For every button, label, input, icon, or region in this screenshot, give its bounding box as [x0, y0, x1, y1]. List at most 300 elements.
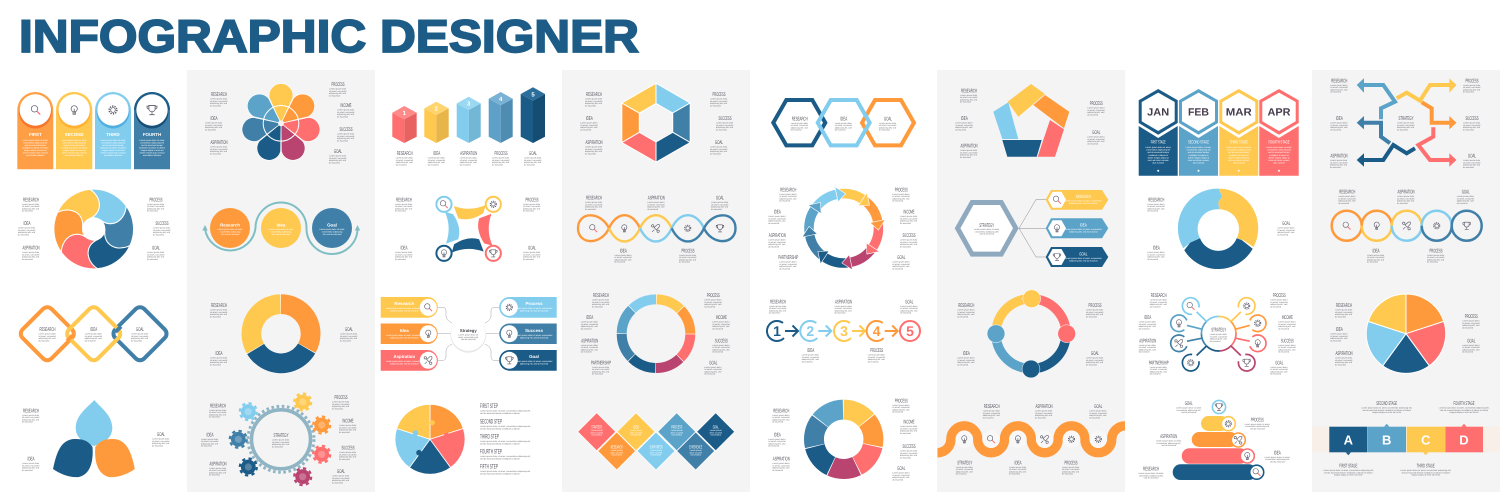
text: goal: GOAL	[1185, 401, 1193, 407]
card: mar: THIRD STAGE	[1230, 140, 1248, 144]
text: success: Lorem ipsum dolor	[1463, 122, 1481, 124]
text: research: Lorem ipsum dolor	[585, 98, 603, 100]
text: idea	[205, 116, 223, 131]
text: process	[1270, 293, 1288, 308]
text: process: do eiusmod	[329, 94, 341, 97]
labels: diamond text: dolor sit amet	[650, 451, 663, 454]
text: aspiration: adipiscing elit, sed	[768, 243, 786, 246]
text: research: do eiusmod	[22, 210, 34, 213]
card: first: Lorem ipsum dolor sit amet,	[22, 139, 49, 142]
text: aspiration: adipiscing elit, sed	[581, 348, 599, 351]
text: aspiration: Lorem ipsum dolor	[22, 251, 40, 254]
text: goal: sit amet, consectet	[900, 307, 918, 310]
text: aspiration: do eiusmod	[768, 245, 780, 248]
text: aspiration: adipiscing elit, sed	[834, 309, 852, 312]
card: jan: sed do eiusmod tempor	[1147, 151, 1169, 154]
text: success: SUCCESS	[1281, 338, 1294, 344]
text: idea	[835, 116, 853, 132]
chart: pie	[1366, 294, 1446, 373]
text: research: Lorem ipsum dolor	[585, 201, 603, 204]
text: idea: adipiscing elit, sed	[1367, 258, 1385, 261]
chart: bars: 1	[403, 110, 407, 117]
text: income: adipiscing elit, sed	[337, 113, 355, 116]
panel: braided chain	[578, 196, 736, 264]
text: success: adipiscing elit, sed	[153, 231, 171, 234]
text: idea: do eiusmod	[955, 128, 967, 131]
text: aspiration: adipiscing elit, sed	[1035, 414, 1053, 417]
text: idea: Lorem ipsum dolor	[768, 215, 786, 218]
text: partnership: sit amet, consectet	[1150, 368, 1167, 371]
card: jan: enim ad minim veniam	[1148, 159, 1169, 162]
text: idea: adipiscing elit, sed	[22, 467, 40, 470]
text: strategy: adipiscing elit, sed	[956, 470, 974, 473]
text: aspiration: sit amet, consectet	[834, 307, 852, 310]
panel: isometric bars	[392, 87, 545, 166]
diagram: numbered circles and arrows: 2	[806, 323, 814, 339]
text: research: sit amet, consectet	[396, 159, 413, 162]
text: goal: Lorem ipsum dolor	[704, 366, 722, 369]
text: process: adipiscing elit, sed	[329, 92, 347, 95]
title: INFOGRAPHIC DESIGNER	[19, 10, 639, 62]
text: success: SUCCESS	[340, 127, 353, 133]
panel: orange wave timeline	[938, 404, 1125, 476]
text: research: RESEARCH	[1336, 303, 1352, 309]
panel: diamond mosaic	[578, 413, 735, 470]
text: research: RESEARCH	[773, 408, 789, 414]
text: idea: sit amet, consectet	[957, 359, 975, 362]
diagram: curved bands	[445, 205, 492, 253]
text: partnership: adipiscing elit, sed	[592, 370, 610, 373]
text: success: sit amet, consectet	[716, 124, 734, 127]
text: research: adipiscing elit, sed	[960, 98, 978, 101]
chart: bars: 4	[499, 96, 503, 103]
text: research	[779, 187, 797, 203]
text: goal: sed do eiusmod	[1181, 411, 1197, 414]
text: aspiration: Lorem ipsum dolor	[209, 467, 227, 470]
text: goal: GOAL	[709, 360, 717, 366]
diagram: three hexagons	[773, 100, 914, 145]
text: idea: Lorem ipsum dolor	[1367, 254, 1385, 257]
text: process: adipiscing elit, sed	[1462, 324, 1480, 327]
text: partnership: sit amet, consectet	[592, 368, 610, 371]
icons: satellite icons	[1175, 302, 1261, 366]
text: goal	[710, 140, 728, 155]
text: success	[339, 446, 357, 461]
card: third: THIRD	[106, 132, 120, 137]
text: idea: sit amet, consectet	[1330, 124, 1348, 127]
text: process: Lorem ipsum dolor sit amet,	[1244, 423, 1271, 426]
text: third step: THIRD STEP	[480, 433, 499, 440]
text: success: SUCCESS	[342, 446, 355, 452]
text: idea: adipiscing elit, sed	[205, 126, 223, 129]
text: process: sit amet, consectet	[1086, 311, 1104, 314]
text: strategy: adipiscing elit, sed	[1210, 338, 1228, 341]
panel: three circles on a wave	[202, 202, 360, 254]
text: fourth step: FOURTH STEP	[480, 448, 502, 455]
centre node: strategy	[450, 316, 486, 353]
text: aspiration	[1330, 154, 1348, 169]
panel: pentagon pinwheel	[955, 84, 1105, 159]
text: goal	[1463, 154, 1481, 169]
text: second stage: Lorem ipsum dolor sit amet, consectetur adipiscing elit,	[1361, 406, 1412, 410]
bar: goal: Lorem ipsum dolor sit amet, consectetur	[516, 360, 553, 363]
text: process: PROCESS	[1465, 314, 1478, 320]
card: third: exercitation ullamco	[104, 154, 123, 157]
text: process: Lorem ipsum dolor	[1086, 308, 1104, 312]
text: goal	[892, 466, 910, 481]
text: research	[395, 197, 413, 213]
text: process: adipiscing elit, sed	[868, 358, 886, 361]
chart: eight arrows	[788, 173, 899, 284]
text: income: sit amet, consectet	[1278, 323, 1296, 326]
text: idea: IDEA	[28, 457, 35, 463]
text: goal: do eiusmod	[892, 267, 904, 270]
labels: diamond text	[590, 424, 722, 457]
text: process: PROCESS	[895, 398, 908, 404]
text: idea: adipiscing elit, sed	[395, 256, 413, 259]
text: second step: SECOND STEP	[480, 418, 502, 425]
text: process: Lorem ipsum dolor	[892, 404, 910, 407]
text: idea	[18, 221, 36, 236]
text: process: do eiusmod	[868, 360, 879, 363]
text: process: adipiscing elit, sed	[1463, 88, 1481, 91]
text: aspiration: sit amet, consectet	[209, 469, 227, 472]
panel: puzzle pie with steps	[395, 403, 531, 476]
text: idea: Lorem ipsum dolor	[1147, 251, 1165, 254]
text: goal	[900, 299, 918, 315]
labels: diamond text: STRATEGY	[591, 424, 602, 430]
chart: hexagon segments	[622, 83, 690, 162]
card: third: consectetur adipiscing elit	[101, 142, 125, 144]
text: idea: IDEA	[1144, 315, 1151, 321]
card: mar: dolore magna aliqua ut	[1228, 156, 1250, 159]
text: goal: sit amet, consectet	[1463, 161, 1481, 164]
text: process: PROCESS	[1466, 78, 1479, 84]
text: idea: sit amet, consectet	[85, 335, 102, 338]
text: idea	[1330, 327, 1348, 342]
text: research: Lorem ipsum dolor sit amet,	[1138, 472, 1164, 475]
bar: success: Lorem ipsum dolor sit amet, consectetur	[516, 334, 553, 337]
text: income: adipiscing elit, sed	[900, 220, 918, 223]
bar: aspiration	[381, 350, 438, 371]
text: idea: adipiscing elit, sed	[955, 126, 973, 129]
text: goal: adipiscing elit, sed	[1457, 200, 1475, 203]
text: income	[900, 210, 918, 225]
text: research: adipiscing elit, sed	[791, 126, 809, 129]
text: idea: IDEA	[586, 315, 593, 321]
text: success: do eiusmod	[716, 128, 728, 131]
text: strategy	[956, 460, 974, 476]
text: idea: IDEA	[774, 210, 781, 216]
text: goal	[1457, 190, 1475, 205]
text: research: RESEARCH	[1151, 293, 1167, 299]
card: apr: dolore magna aliqua ut	[1268, 156, 1290, 159]
card: second: consectetur adipiscing elit	[62, 142, 87, 144]
text: research: Lorem ipsum dolor	[209, 409, 227, 412]
text: process: adipiscing elit, sed	[710, 102, 728, 105]
text: research: do eiusmod	[960, 101, 972, 104]
text: aspiration	[460, 151, 478, 166]
tag: research: Lorem ipsum dolor sit amet, consectetur	[1065, 200, 1102, 202]
text: idea: Lorem ipsum dolor	[201, 438, 219, 441]
panel: lettered stages	[1312, 401, 1500, 477]
labels: diamond text: Lorem ipsum	[650, 449, 662, 452]
panel: numbered chain	[767, 299, 920, 363]
text: research: sit amet, consectet	[1150, 301, 1167, 304]
text: partnership	[591, 360, 611, 376]
text: research: do eiusmod	[210, 315, 222, 318]
text: aspiration: Lorem ipsum dolor	[772, 462, 790, 465]
text: success: SUCCESS	[156, 221, 169, 227]
text: goal: GOAL	[152, 246, 160, 252]
labels: diamond text: dolor sit amet	[610, 451, 623, 454]
text: goal: adipiscing elit, sed	[523, 256, 541, 259]
centre node: strategy: amet, consectetur elit	[458, 336, 479, 339]
text: idea: IDEA	[586, 116, 593, 122]
text: aspiration: sit amet, consectet	[960, 151, 978, 154]
labels: diamond text: consectetur	[631, 434, 642, 437]
panel: grey column 2	[187, 70, 375, 492]
text: research	[210, 92, 228, 107]
text: process: PROCESS	[707, 293, 720, 299]
text: goal: GOAL	[136, 327, 144, 333]
text: aspiration: Lorem ipsum dolor	[960, 149, 978, 152]
text: research	[210, 303, 228, 318]
text: goal: Lorem ipsum dolor	[131, 332, 149, 336]
text: idea: Lorem ipsum dolor	[205, 122, 223, 124]
card: second: Lorem ipsum dolor sit amet,	[61, 139, 87, 142]
text: research: adipiscing elit, sed	[1338, 200, 1356, 203]
text: process: adipiscing elit, sed	[147, 207, 165, 210]
centre hexagon: strategy: Lorem ipsum dolor sit amet,	[974, 228, 1000, 231]
text: idea: do eiusmod	[18, 233, 30, 236]
text: income: Lorem ipsum dolor	[1278, 320, 1296, 324]
text: research: adipiscing elit, sed	[395, 207, 413, 210]
text: idea: IDEA	[1336, 116, 1343, 122]
text: aspiration: ASPIRATION	[581, 338, 598, 344]
panel: grey column 6	[937, 70, 1125, 492]
text: process: sit amet, consectet	[332, 403, 350, 406]
text: research: Lorem ipsum dolor	[22, 203, 40, 206]
text: goal: do eiusmod	[879, 129, 891, 132]
text: first stage: magna aliqua ut enim ad minim	[1334, 474, 1363, 477]
text: goal: GOAL	[345, 327, 353, 333]
text: goal: GOAL	[337, 469, 345, 475]
text: goal: sit amet, consectet	[523, 253, 541, 256]
text: strategy: adipiscing elit, sed	[1397, 126, 1415, 129]
text: second stage: magna aliqua ut enim ad minim	[1372, 411, 1401, 414]
text: idea: IDEA	[90, 327, 97, 333]
text: aspiration	[768, 233, 786, 248]
text: partnership: do eiusmod	[1150, 373, 1161, 376]
text: aspiration: do eiusmod	[1335, 363, 1347, 366]
text: aspiration: Lorem ipsum dolor	[210, 146, 228, 148]
text: idea	[1009, 460, 1027, 476]
diagram: numbered circles and arrows: 4	[873, 323, 881, 339]
panel: gears	[201, 394, 357, 485]
card: fourth: FOURTH	[143, 132, 161, 137]
text: goal: GOAL	[716, 196, 724, 202]
text: goal	[131, 327, 149, 342]
circle: goal: consectetur adipiscing	[322, 230, 343, 233]
circle: goal: Goal	[327, 222, 337, 228]
panel: hexagon arrows	[1330, 78, 1481, 169]
tag: goal: Lorem ipsum dolor sit amet, consectetur	[1065, 257, 1102, 260]
text: fifth step	[480, 464, 531, 476]
text: research: adipiscing elit, sed	[38, 337, 56, 340]
text: idea: sit amet, consectet	[581, 323, 598, 326]
text: aspiration	[647, 196, 665, 211]
text: process: Lorem ipsum dolor	[710, 98, 728, 100]
text: process: sit amet, consectet	[868, 356, 885, 359]
chart: puzzle pie	[395, 404, 465, 474]
text: research: sit amet, consectet	[585, 203, 603, 206]
labels: diamond text: dolor sit amet	[670, 431, 683, 434]
chart: letter blocks: A	[1344, 432, 1354, 447]
text: goal: do eiusmod	[523, 258, 535, 261]
text: research: sit amet, consectet	[1147, 205, 1165, 208]
text: idea: adipiscing elit, sed	[802, 358, 820, 361]
text: idea: IDEA	[210, 116, 218, 122]
text: goal	[1462, 338, 1480, 354]
text: idea: Lorem ipsum dolor	[955, 122, 973, 124]
text: process: sit amet, consectet	[892, 195, 910, 198]
panel: swirl	[18, 181, 171, 277]
text: goal: sit amet, consectet	[711, 203, 729, 206]
text: goal: adipiscing elit, sed	[1277, 231, 1295, 234]
text: idea: Lorem ipsum dolor	[428, 156, 445, 160]
text: success	[716, 116, 734, 131]
text: goal: GOAL	[905, 299, 913, 305]
text: goal: GOAL	[334, 149, 342, 155]
text: process: PROCESS	[895, 187, 908, 193]
text: process	[1427, 248, 1445, 264]
text: research: sit amet, consectet	[1338, 197, 1356, 200]
text: goal: sit amet, consectet	[1086, 359, 1104, 362]
chart: four arcs with bubbles	[987, 290, 1076, 378]
text: idea: sed do eiusmod	[1270, 460, 1285, 463]
panel: month hexagon cards	[1139, 89, 1299, 176]
text: goal: adipiscing elit, sed	[710, 150, 728, 153]
text: process: PROCESS	[526, 197, 539, 203]
labels: diamond text: SUPPORTER	[650, 444, 663, 450]
chart: letter blocks: C	[1421, 432, 1431, 447]
text: research: sit amet, consectet	[38, 335, 56, 338]
text: research: adipiscing elit, sed	[22, 418, 40, 421]
circle: idea: elit, sed do eiusmod	[272, 233, 291, 236]
text: goal: GOAL	[884, 116, 892, 122]
text: income: do eiusmod	[900, 222, 912, 225]
text: strategy: adipiscing elit, sed	[272, 443, 290, 446]
card: second: magna aliqua ut enim ad	[63, 149, 86, 152]
text: aspiration: ASPIRATION	[1336, 351, 1353, 357]
text: partnership: adipiscing elit, sed	[779, 265, 797, 268]
panel: linked rounded diamonds	[18, 305, 169, 363]
text: process	[892, 398, 910, 414]
text: success: adipiscing elit, sed	[900, 243, 918, 246]
panel: four-node loop	[395, 197, 541, 261]
panel: hexagon strategy tags	[955, 190, 1108, 267]
text: research	[769, 299, 787, 315]
text: research: Lorem ipsum dolor	[1330, 84, 1348, 87]
card: apr: Lorem ipsum dolor sit amet,	[1266, 146, 1292, 149]
chart: jagged donut	[1178, 189, 1258, 269]
text: goal: do eiusmod	[711, 208, 723, 211]
panel: three drops	[22, 400, 170, 477]
text: research	[1330, 78, 1348, 94]
text: second step	[480, 418, 531, 430]
text: success: do eiusmod	[337, 139, 349, 142]
text: idea: do eiusmod	[201, 445, 213, 448]
text: idea: do eiusmod	[835, 129, 846, 132]
text: success: Lorem ipsum dolor	[339, 451, 357, 454]
text: third stage: Lorem ipsum dolor sit amet, consectetur adipiscing elit,	[1400, 469, 1451, 472]
text: income: sit amet, consectet	[339, 426, 357, 429]
text: idea	[802, 348, 820, 363]
text: idea	[1330, 116, 1348, 131]
text: research: adipiscing elit, sed	[585, 102, 603, 105]
text: aspiration: Lorem ipsum dolor	[647, 201, 665, 204]
icons: wave nodes	[956, 430, 1107, 448]
text: aspiration	[1035, 404, 1053, 419]
text: goal: sit amet, consectet	[152, 440, 170, 443]
text: goal: Lorem ipsum dolor	[523, 251, 541, 254]
text: aspiration: sit amet, consectet	[581, 346, 598, 349]
card: mar: sed do eiusmod tempor	[1228, 151, 1250, 154]
card: third: Lorem ipsum dolor sit amet,	[100, 139, 126, 142]
text: aspiration: adipiscing elit, sed	[960, 154, 978, 157]
text: income: INCOME	[904, 420, 915, 426]
text: research: adipiscing elit, sed	[957, 313, 975, 316]
text: goal: GOAL	[897, 255, 905, 261]
text: research: sit amet, consectet	[983, 412, 1000, 415]
text: idea: Lorem ipsum dolor	[802, 354, 819, 356]
text: goal: GOAL	[1282, 221, 1290, 227]
text: fourth stage: sed do eiusmod tempor incididunt ut labore et dolore	[1440, 409, 1489, 412]
text: research: Lorem ipsum dolor	[772, 414, 790, 417]
labels: diamond text: Lorem ipsum	[690, 449, 702, 452]
text: research: adipiscing elit, sed	[22, 207, 40, 210]
text: success: do eiusmod	[1463, 128, 1475, 131]
card: feb: incididunt ut labore et	[1189, 154, 1209, 157]
text: idea: Lorem ipsum dolor	[768, 438, 786, 441]
text: goal: Lorem ipsum dolor	[340, 332, 358, 336]
text: idea: Lorem ipsum dolor	[22, 462, 40, 465]
text: success: sit amet, consectet	[339, 453, 357, 456]
text: process: sed do eiusmod	[1250, 427, 1265, 430]
text: research: adipiscing elit, sed	[210, 313, 228, 316]
panel: linked hexagons	[773, 100, 914, 145]
text: research	[983, 404, 1001, 419]
text: goal: sit amet, consectet	[340, 335, 358, 338]
text: research	[1338, 190, 1356, 205]
text: idea: do eiusmod	[768, 445, 780, 448]
text: research	[1138, 467, 1164, 480]
text: goal: GOAL	[1092, 130, 1100, 136]
text: aspiration: Lorem ipsum dolor	[1330, 159, 1348, 162]
text: goal: sit amet, consectet	[1087, 138, 1105, 141]
text: aspiration: adipiscing elit, sed	[772, 467, 790, 470]
text: research: sit amet, consectet	[772, 416, 790, 419]
text: goal: Lorem ipsum dolor	[1089, 410, 1107, 412]
text: strategy: do eiusmod	[956, 473, 967, 476]
text: research: adipiscing elit, sed	[1150, 303, 1168, 306]
text: research: RESEARCH	[984, 404, 1000, 410]
text: idea	[581, 315, 599, 330]
text: process: Lorem ipsum dolor	[332, 400, 350, 404]
text: idea: adipiscing elit, sed	[1139, 325, 1157, 328]
chart: six-part swirl	[43, 181, 144, 277]
